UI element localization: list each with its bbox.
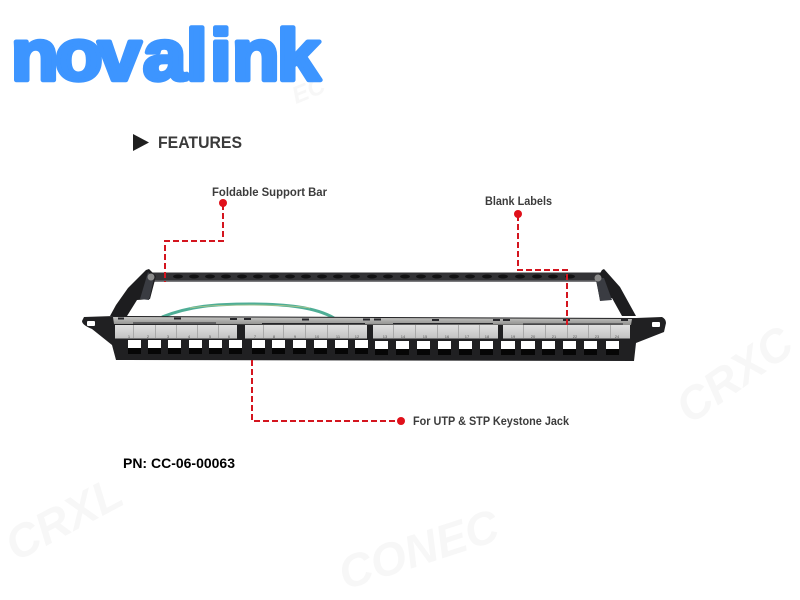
- port numbers: 8: [273, 334, 276, 339]
- marker dot: [219, 199, 227, 207]
- watermarks: CONEC: [332, 499, 506, 600]
- port numbers: [128, 334, 620, 339]
- port numbers: 21: [552, 334, 557, 339]
- port numbers: 4: [188, 334, 191, 339]
- strip slots and rails: [118, 318, 628, 324]
- port numbers: 20: [531, 334, 536, 339]
- label: For UTP & STP Keystone Jack: [413, 414, 569, 428]
- patch panel product image: [82, 269, 666, 361]
- port numbers: 18: [485, 334, 490, 339]
- marker dot: [397, 417, 405, 425]
- port numbers: 3: [167, 334, 170, 339]
- port numbers: 5: [209, 334, 212, 339]
- port numbers: 7: [254, 334, 257, 339]
- support bar: [150, 272, 602, 282]
- callout: blank labels: [485, 194, 567, 325]
- port numbers: 1: [128, 334, 131, 339]
- right bracket: [594, 269, 636, 316]
- port numbers: 10: [315, 334, 320, 339]
- watermarks: CRXC: [666, 315, 800, 433]
- label: Blank Labels: [485, 194, 552, 208]
- port numbers: 12: [355, 334, 360, 339]
- keystone label blocks: [115, 325, 630, 338]
- heading text: FEATURES: [158, 133, 242, 152]
- port numbers: 24: [615, 334, 620, 339]
- marker dot: [514, 210, 522, 218]
- leader line: [165, 204, 223, 282]
- icon: heading arrow: [133, 134, 149, 151]
- part number: PN: CC-06-00063: [123, 455, 235, 471]
- port numbers: 17: [465, 334, 470, 339]
- label dividers: [133, 325, 611, 338]
- heading: features: [133, 133, 242, 152]
- leader line: [252, 360, 401, 421]
- top metal strip: [113, 317, 632, 325]
- label: Foldable Support Bar: [212, 185, 327, 199]
- port numbers: 2: [147, 334, 150, 339]
- port numbers: 11: [336, 334, 341, 339]
- port numbers: 6: [228, 334, 231, 339]
- leader line: [518, 215, 567, 325]
- logo: novalink: novalink: [11, 15, 321, 95]
- panel body: [82, 316, 666, 361]
- port numbers: 13: [383, 334, 388, 339]
- left bracket: [110, 269, 156, 316]
- port numbers: 23: [595, 334, 600, 339]
- callout: keystone jack: [252, 360, 569, 428]
- watermarks: EC: [288, 72, 330, 110]
- callout: foldable support bar: [165, 185, 327, 282]
- port numbers: 16: [445, 334, 450, 339]
- watermarks: CRXL: [0, 466, 131, 571]
- port numbers: 22: [573, 334, 578, 339]
- port numbers: 19: [511, 334, 516, 339]
- mounting slots: [87, 321, 660, 327]
- port numbers: 15: [423, 334, 428, 339]
- green ground cable: [162, 304, 334, 318]
- port numbers: 14: [401, 334, 406, 339]
- port numbers: 9: [294, 334, 297, 339]
- port openings: [128, 340, 619, 355]
